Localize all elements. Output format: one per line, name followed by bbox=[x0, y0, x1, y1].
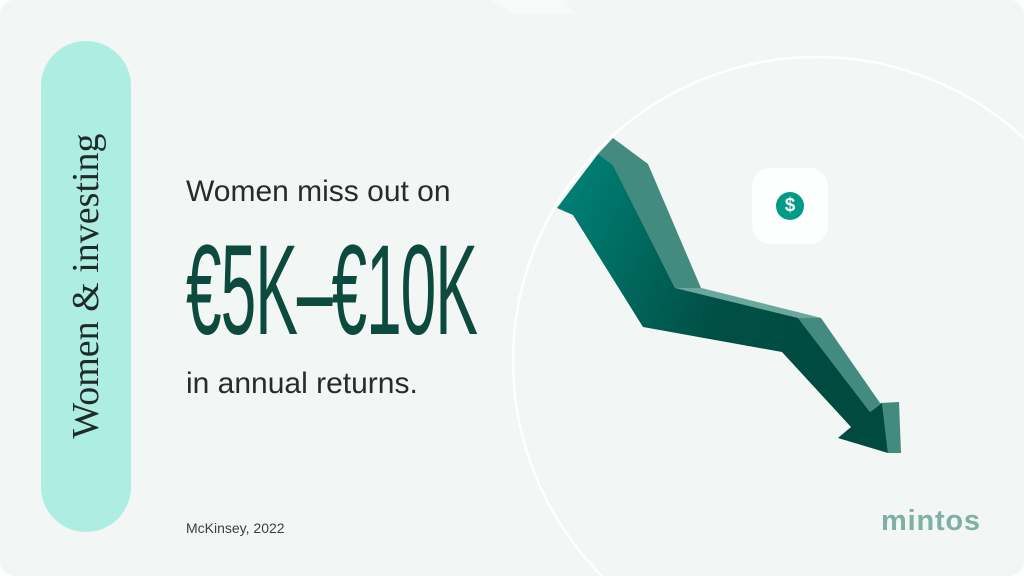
logo: mintos bbox=[881, 505, 981, 537]
side pill label bbox=[41, 41, 131, 532]
arrow bbox=[557, 138, 901, 453]
source: McKinsey, 2022 bbox=[186, 520, 285, 536]
icon: dollar card: $ bbox=[785, 195, 795, 216]
big figure: €5K–€10K bbox=[186, 219, 477, 362]
headline outro: in annual returns. bbox=[186, 367, 418, 400]
icon: dollar card bbox=[752, 168, 828, 244]
headline intro: Women miss out on bbox=[186, 175, 451, 208]
side pill label: Women & investing bbox=[65, 133, 107, 439]
